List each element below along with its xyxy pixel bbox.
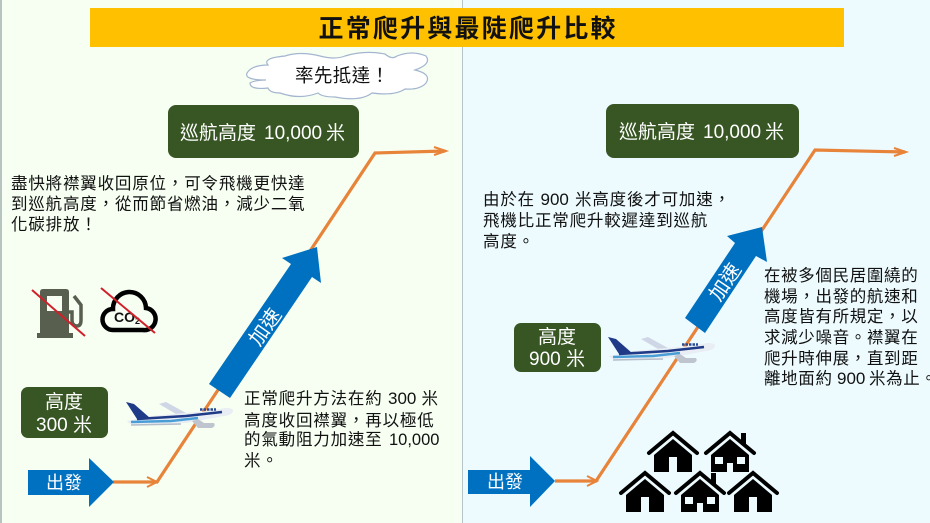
left departure arrow: 出發 bbox=[46, 473, 82, 493]
left text: retract flaps quickly: 盡快將襟翼收回原位，可令飛機更快達 bbox=[11, 174, 305, 193]
right altitude box 900 m: 高度 bbox=[538, 326, 576, 348]
left cruise altitude box bbox=[168, 105, 359, 158]
left text: normal climb: 300 bbox=[388, 389, 416, 408]
left plane bbox=[126, 402, 233, 428]
right text: late acceleration: ， bbox=[714, 191, 731, 209]
left text: normal climb: 高度收回襟翼，再以極低 bbox=[244, 411, 435, 430]
icon: fuel pump crossed out bbox=[32, 289, 85, 338]
right text: late acceleration bbox=[483, 190, 731, 251]
right text: late acceleration: 900 bbox=[540, 190, 569, 209]
left text: retract flaps quickly: 化碳排放！ bbox=[11, 215, 98, 234]
right text: late acceleration: 飛機比正常爬升較遲達到巡航 bbox=[483, 211, 708, 230]
left text: retract flaps quickly bbox=[11, 174, 305, 234]
right text: noise regulations: 900 bbox=[837, 369, 865, 388]
icon: CO2 cloud crossed out bbox=[101, 288, 156, 333]
right acceleration arrow bbox=[685, 227, 767, 333]
callout: cloud first to arrive bbox=[247, 52, 428, 99]
background: left panel bbox=[0, 0, 462, 523]
left flight path bbox=[113, 147, 446, 487]
left text: normal climb: 10,000 bbox=[389, 431, 439, 449]
right text: noise regulations: 求減少噪音。襟翼在 bbox=[764, 328, 918, 347]
left cruise altitude box: 巡航高度 bbox=[180, 122, 256, 144]
right acceleration arrow: 加速 bbox=[705, 259, 746, 305]
right text: noise regulations: 機場，出發的航速和 bbox=[764, 287, 918, 306]
right altitude box 900 m: 900 米 bbox=[529, 348, 585, 370]
right cruise altitude box: 巡航高度 bbox=[619, 121, 695, 143]
right text: late acceleration: 米高度後才可加速 bbox=[575, 190, 714, 209]
title: 正常爬升與最陡爬升比較 bbox=[318, 15, 616, 43]
left text: normal climb: 米。 bbox=[244, 451, 279, 470]
left cruise altitude box: 10,000 bbox=[264, 123, 322, 144]
left acceleration arrow bbox=[209, 247, 321, 398]
right text: late acceleration: 由於在 bbox=[483, 190, 535, 209]
right text: noise regulations: 離地面約 bbox=[764, 369, 833, 388]
left text: normal climb: 的氣動阻力加速至 bbox=[244, 430, 383, 449]
left altitude box 300 m bbox=[21, 387, 108, 438]
right text: noise regulations: 爬升時伸展，直到距 bbox=[764, 349, 918, 368]
right text: noise regulations: 高度皆有所規定，以 bbox=[764, 307, 918, 326]
left text: normal climb bbox=[244, 389, 439, 470]
right cruise altitude box bbox=[606, 104, 799, 158]
right departure arrow: 出發 bbox=[487, 472, 523, 492]
left altitude box 300 m: 高度 bbox=[45, 391, 83, 413]
right cruise altitude box: 米 bbox=[765, 121, 784, 143]
callout: cloud first to arrive: 率先抵達！ bbox=[295, 65, 390, 86]
title bbox=[90, 8, 844, 47]
right altitude box 900 m bbox=[514, 323, 601, 372]
right text: noise regulations: 米為止 bbox=[869, 369, 920, 388]
left acceleration arrow: 加速 bbox=[245, 304, 286, 350]
left departure arrow bbox=[28, 458, 114, 507]
right cruise altitude box: 10,000 bbox=[703, 122, 761, 143]
right flight path bbox=[555, 148, 906, 486]
left text: normal climb: 正常爬升方法在約 bbox=[244, 389, 383, 408]
icon: CO2 cloud crossed out: CO bbox=[114, 309, 135, 325]
right text: noise regulations: 在被多個民居圍繞的 bbox=[764, 266, 918, 285]
icon: CO2 cloud crossed out: 2 bbox=[135, 316, 140, 326]
right plane bbox=[608, 337, 715, 363]
right departure arrow bbox=[468, 456, 555, 507]
left text: normal climb: 米 bbox=[422, 389, 439, 408]
background: right panel bbox=[463, 0, 930, 523]
right text: noise regulations bbox=[764, 266, 930, 388]
left text: retract flaps quickly: 到巡航高度，從而節省燃油，減少二氧 bbox=[11, 194, 305, 214]
left altitude box 300 m: 300 米 bbox=[36, 414, 92, 436]
icon: houses bbox=[621, 433, 777, 512]
right text: late acceleration: 高度。 bbox=[483, 232, 535, 251]
left cruise altitude box: 米 bbox=[326, 122, 345, 144]
